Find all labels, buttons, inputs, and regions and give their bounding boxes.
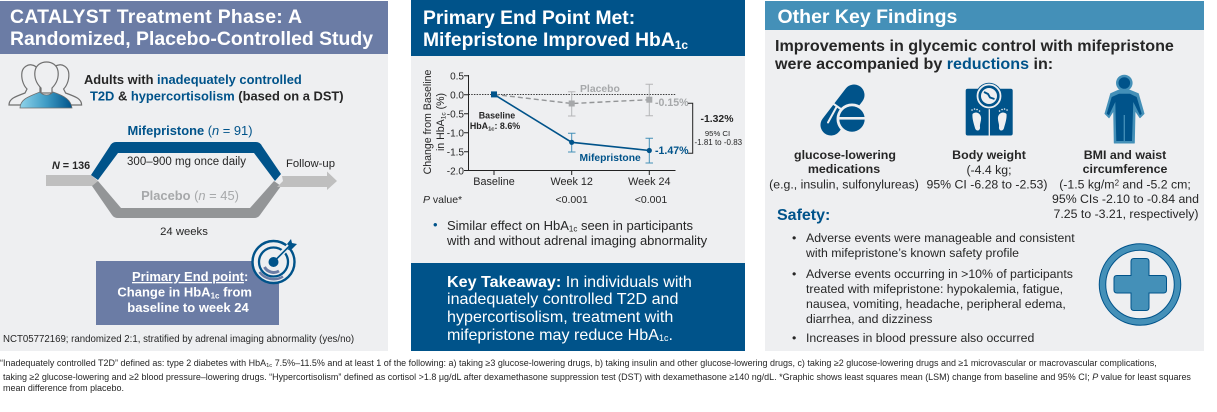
y-axis tick labels — [447, 71, 464, 177]
panel: study design — [0, 1, 388, 351]
icon: person — [1105, 75, 1144, 143]
label: medications — [808, 162, 880, 176]
annotation: baseline HbA1c: HbA — [470, 121, 488, 131]
y-axis tick labels: 0.0 — [450, 90, 464, 101]
bullet: adrenal imaging: 1c — [569, 224, 577, 234]
callout: primary end point — [96, 261, 279, 325]
callout: primary end point: 1c — [211, 292, 220, 300]
label: Body weight — [952, 148, 1026, 162]
label: glucose-lowering — [794, 148, 896, 162]
callout: key takeaway: 1c — [659, 333, 669, 343]
callout: primary end point: Primary End point: — [132, 269, 248, 284]
population description: T2D & hypercortisolism (based on a DST) — [90, 88, 344, 104]
x-axis labels: Week 24 — [628, 176, 671, 188]
label — [927, 148, 1047, 192]
finding: BMI and waist circumference — [1052, 75, 1199, 221]
bullet: adrenal imaging: seen in participants — [577, 218, 693, 233]
footnotes: 1c — [266, 363, 272, 369]
note: randomization: NCT05772169; randomized 2:1, stratified by adrenal imaging abnormality (yes/no) — [3, 334, 354, 345]
randomization flow diagram — [46, 123, 337, 238]
icon: scale — [966, 83, 1013, 136]
annotation: difference and confidence interval: 95% CI — [705, 129, 730, 138]
footnotes: mean difference from placebo. — [3, 383, 124, 393]
label: (-1.5 kg/m — [1059, 178, 1115, 192]
finding: body weight — [927, 83, 1047, 192]
safety bullet list: Adverse events occurring in >10% of participants — [806, 267, 1073, 281]
callout: key takeaway — [411, 263, 745, 351]
annotation: baseline HbA1c: 1c — [488, 126, 495, 132]
label: and -5.2 cm; — [1119, 178, 1191, 192]
label: BMI and waist — [1084, 148, 1166, 162]
y-axis tick labels: 0.5 — [450, 71, 464, 82]
callout: primary end point: baseline to week 24 — [127, 300, 249, 315]
series: placebo: -0.15% — [655, 97, 689, 109]
heading: study design — [0, 1, 388, 54]
p values: P value* — [423, 194, 462, 206]
annotation: difference and confidence interval: -1.81 to -0.83 — [695, 138, 743, 147]
y-axis title: in HbA — [435, 119, 447, 151]
arm: placebo path — [92, 181, 281, 218]
x-axis labels: Week 12 — [550, 176, 593, 188]
heading: primary end point — [411, 0, 745, 56]
y-axis title: 1c — [440, 112, 448, 119]
heading: primary end point: 1c — [675, 38, 688, 52]
annotation: baseline HbA1c: Baseline — [479, 110, 515, 120]
bullet: adrenal imaging: • — [433, 217, 438, 232]
bullet: adrenal imaging: Similar effect on HbA — [447, 218, 569, 233]
y-axis title — [422, 69, 448, 174]
p values: <0.001 — [635, 194, 667, 206]
callout: key takeaway: Key Takeaway: In individuals with — [447, 273, 692, 291]
label: dose: 300–900 mg once daily — [127, 156, 246, 168]
footnotes: 7.5%–11.5% and at least 1 of the following: a) taking ≥3 glucose-lowering drugs, b) taking insulin and other glucose-lowering drugs, c) taking ≥2 glucose-lowering drugs and ≥1 microvascular or macrovascular complications, — [272, 358, 1157, 368]
series: mifepristone: Mifepristone — [580, 153, 641, 164]
label: follow-up: Follow-up — [286, 158, 335, 170]
annotation: difference and confidence interval — [695, 114, 743, 147]
heading: other key findings: Other Key Findings — [778, 6, 958, 28]
footnotes: “Inadequately controlled T2D” defined as: type 2 diabetes with HbA — [0, 358, 266, 368]
safety bullet list: • — [792, 331, 796, 345]
annotation: baseline HbA1c: : 8.6% — [495, 121, 520, 131]
p values — [423, 194, 667, 206]
label: placebo arm: Placebo (n = 45) — [141, 188, 239, 203]
series: placebo — [494, 84, 689, 116]
arm: mifepristone path — [91, 142, 281, 181]
bullet: adrenal imaging: with and without adrenal imaging abnormality — [446, 233, 708, 248]
label: (-4.4 kg; — [966, 163, 1012, 177]
y-axis tick labels: -1.0 — [447, 128, 464, 139]
p values: <0.001 — [555, 194, 588, 206]
arrow: follow-up — [277, 172, 337, 190]
y-axis tick labels: -0.5 — [447, 109, 464, 120]
callout: key takeaway: . — [669, 326, 673, 344]
heading: other key findings — [765, 1, 1204, 30]
bracket: treatment difference — [688, 103, 693, 153]
label: 95% CI -6.28 to -2.53) — [927, 178, 1047, 192]
icon: target with dart — [252, 239, 297, 283]
total sample size: N = 136 — [52, 160, 90, 172]
safety bullet list: diarrhea, and dizziness — [806, 312, 932, 326]
heading: study design: CATALYST Treatment Phase: A — [10, 6, 302, 28]
callout: primary end point: Change in HbA — [117, 284, 211, 300]
y-axis title: Change from Baseline — [422, 69, 434, 174]
panel: other key findings — [765, 1, 1204, 351]
annotation: difference and confidence interval: -1.32% — [701, 114, 733, 125]
label: 95% CIs -2.10 to -0.84 and — [1052, 192, 1199, 206]
callout: key takeaway: mifepristone may reduce HbA — [447, 326, 659, 344]
callout: key takeaway: hypercortisolism, treatment with — [447, 308, 673, 326]
axes — [464, 75, 676, 175]
y-axis title: (%) — [435, 93, 447, 112]
y-axis tick labels: -2.0 — [447, 166, 464, 177]
callout: key takeaway: inadequately controlled T2D and — [447, 290, 678, 308]
y-axis tick labels: -1.5 — [447, 147, 464, 158]
finding: glucose-lowering medications — [769, 95, 919, 192]
safety bullet list: Adverse events were manageable and consistent — [806, 231, 1075, 245]
safety bullet list — [792, 231, 1075, 345]
label: mifepristone arm: Mifepristone (n = 91) — [127, 123, 253, 138]
label: duration: 24 weeks — [160, 226, 208, 238]
series: placebo: Placebo — [580, 84, 620, 95]
annotation: baseline HbA1c — [470, 110, 520, 132]
population description — [84, 72, 344, 104]
safety bullet list: Increases in blood pressure also occurred — [806, 331, 1034, 345]
safety bullet list: nausea, vomiting, headache, peripheral edema, — [806, 297, 1066, 311]
label — [1052, 148, 1199, 221]
label — [769, 148, 919, 192]
icon: group of people — [9, 62, 82, 108]
heading: safety: Safety: — [777, 207, 830, 224]
series: mifepristone — [491, 91, 689, 164]
label: circumference — [1083, 162, 1167, 176]
footnotes: taking ≥2 glucose-lowering and ≥2 blood pressure–lowering drugs. “Hypercortisolism” defined as cortisol >1.8 μg/dL after dexamethasone suppression test (DST) with dexamethasone ≥140 ng/dL. *Graphic shows least squares mean (LSM) change from baseline and 95% CI; P value for least squares — [3, 372, 1191, 382]
subheading: reductions: were accompanied by reductions in: — [774, 55, 1053, 73]
footnotes — [0, 358, 1191, 393]
line chart: change in HbA1c — [422, 69, 743, 206]
x-axis labels: Baseline — [473, 176, 515, 188]
heading: primary end point: Mifepristone Improved HbA — [423, 30, 675, 51]
population description: Adults with inadequately controlled — [84, 72, 302, 87]
callout: primary end point: from — [219, 284, 252, 300]
heading: study design: Randomized, Placebo-Controlled Study — [10, 28, 373, 50]
safety bullet list: • — [792, 231, 796, 245]
icon: pills — [828, 95, 868, 134]
subheading: reductions: Improvements in glycemic control with mifepristone — [775, 37, 1174, 55]
icon: medical cross — [1102, 247, 1178, 322]
label: (e.g., insulin, sulfonylureas) — [769, 178, 919, 192]
subheading: reductions — [774, 37, 1174, 73]
safety bullet list: with mifepristone’s known safety profile — [805, 246, 1019, 260]
x-axis labels — [473, 176, 671, 188]
label: 2 — [1115, 178, 1120, 188]
panel: primary end point — [411, 0, 745, 351]
bullet: adrenal imaging — [433, 217, 708, 248]
series: mifepristone: -1.47% — [655, 145, 689, 157]
arrow: enrolment — [46, 175, 98, 186]
heading: primary end point: Primary End Point Met: — [423, 8, 635, 29]
label: 7.25 to -3.21, respectively) — [1054, 207, 1198, 221]
safety bullet list: • — [792, 267, 796, 281]
safety bullet list: treated with mifepristone: hypokalemia, fatigue, — [806, 282, 1063, 296]
